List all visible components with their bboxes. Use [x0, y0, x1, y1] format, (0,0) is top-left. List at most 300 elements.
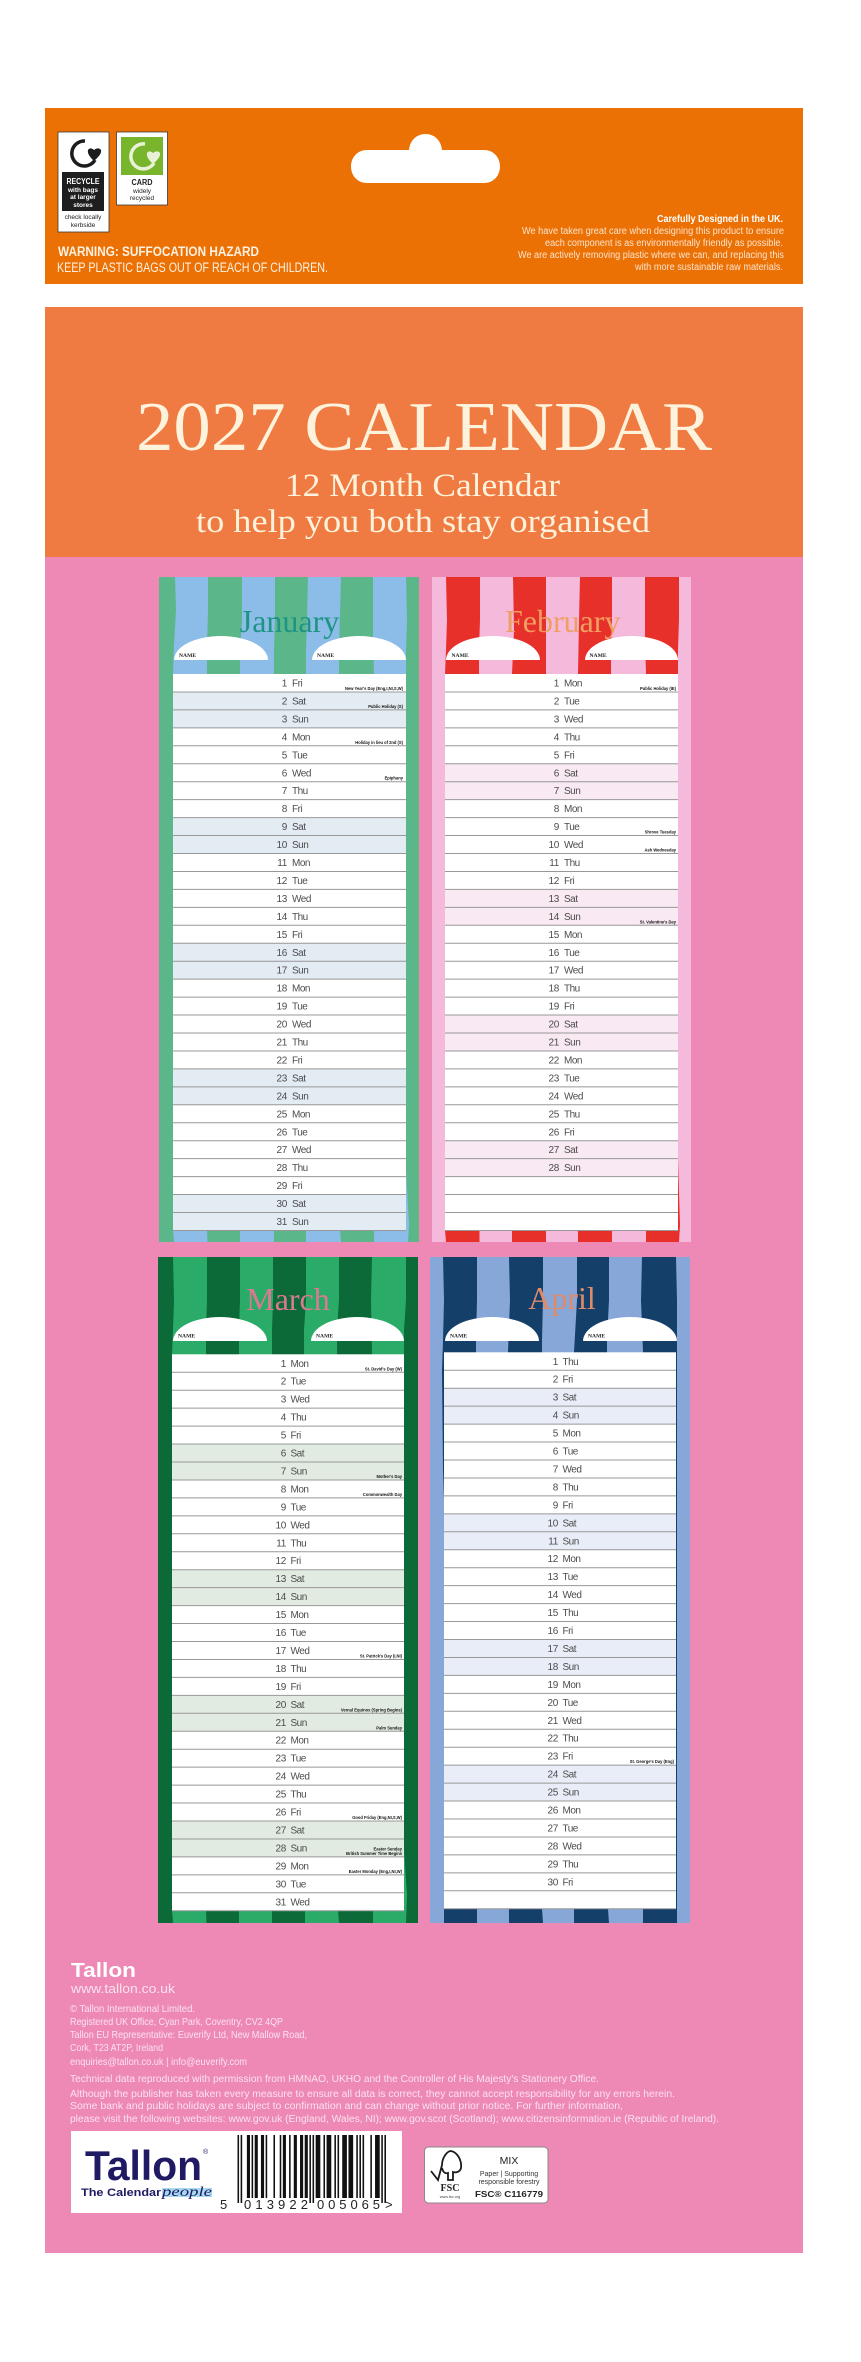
- day table: Mon: [290, 1861, 308, 1872]
- day table: Wed: [564, 966, 583, 977]
- day table: Thu: [290, 1664, 306, 1675]
- day table: Tue: [564, 1073, 580, 1084]
- day table: 21: [548, 1038, 560, 1048]
- day table: Wed: [292, 894, 311, 905]
- day table: 25: [548, 1109, 560, 1120]
- day table: [444, 1352, 676, 1909]
- website: www.tallon.co.uk: [70, 1981, 176, 1996]
- day table: Mon: [562, 1429, 580, 1440]
- day table: 12: [276, 876, 288, 887]
- publisher details: [70, 1960, 719, 2125]
- day table: 3: [281, 1395, 287, 1406]
- day table: Commonwealth Day: [363, 1492, 403, 1497]
- day table: Sun: [564, 1038, 580, 1048]
- day table: Sat: [292, 1199, 306, 1210]
- day table: Wed: [564, 1091, 583, 1102]
- day table: 28: [276, 1163, 288, 1174]
- day table: 1: [282, 678, 288, 690]
- day table: 29: [547, 1859, 559, 1870]
- day table: 22: [276, 1055, 288, 1066]
- day table: 16: [276, 948, 288, 959]
- addresses: © Tallon International Limited.: [70, 2003, 195, 2015]
- day table: Sat: [290, 1574, 305, 1585]
- day table: 7: [281, 1467, 287, 1478]
- environmental note: with more sustainable raw materials.: [634, 262, 783, 273]
- day table: 10: [276, 840, 288, 851]
- month title: April: [528, 1280, 596, 1316]
- day table: 5: [282, 750, 288, 761]
- day table: 19: [548, 1002, 560, 1013]
- day table: 15: [276, 930, 288, 941]
- day table: Tue: [564, 948, 580, 959]
- icon: FSC tree: [431, 2151, 461, 2180]
- day table: 9: [553, 1500, 559, 1511]
- icon: card widely recycled: widely: [132, 188, 152, 195]
- FSC certification label: www.fsc.org: [440, 2195, 460, 2199]
- subtitle: to help you both stay organised: [196, 504, 651, 540]
- day table: Fri: [564, 876, 574, 887]
- day table: St. George's Day (Eng): [630, 1759, 675, 1764]
- day table: Vernal Equinox (Spring Begins): [341, 1707, 403, 1712]
- day table: 27: [547, 1824, 559, 1835]
- day table: Public Holiday (S): [368, 704, 404, 709]
- icon: card widely recycled: recycled: [130, 195, 154, 202]
- day table: Sun: [290, 1467, 307, 1478]
- day table: 3: [554, 714, 560, 725]
- name tabs: [173, 1317, 404, 1341]
- day table: 24: [547, 1770, 559, 1781]
- day table: Thu: [564, 1109, 580, 1120]
- day table: 6: [553, 1447, 559, 1458]
- name tabs: [174, 636, 406, 660]
- legal text: Some bank and public holidays are subject to confirmation and can change without prior notice. For further information,: [70, 2101, 623, 2112]
- day table: 30: [547, 1877, 559, 1888]
- day table: Wed: [564, 840, 583, 851]
- day table: Mon: [290, 1484, 308, 1495]
- day table: 15: [548, 930, 560, 941]
- day table: Fri: [292, 804, 302, 815]
- day table: Wed: [290, 1772, 309, 1783]
- day table: 7: [282, 786, 288, 797]
- barcode digits: [220, 2197, 393, 2212]
- day table: 13: [548, 894, 560, 905]
- day table: St. Patrick's Day (I,NI): [360, 1654, 403, 1659]
- month title: March: [246, 1281, 330, 1317]
- day table: Tue: [564, 822, 580, 833]
- day table: 17: [276, 966, 288, 977]
- day table: Sun: [292, 1091, 308, 1102]
- day table: Sun: [564, 786, 580, 797]
- day table: Sun: [562, 1788, 579, 1799]
- day table: 14: [547, 1590, 559, 1601]
- day table: Sat: [290, 1700, 305, 1711]
- environmental note: We are actively removing plastic where we can, and replacing this: [518, 250, 784, 261]
- day table: 5: [281, 1431, 287, 1442]
- name tabs: NAME: [452, 653, 469, 659]
- logo: Tallon The Calendar people: people: [161, 2185, 212, 2200]
- day table: 15: [275, 1610, 287, 1621]
- day table: 23: [547, 1752, 559, 1763]
- FSC certification label: Paper | Supporting: [480, 2171, 538, 2178]
- day table: 19: [547, 1680, 559, 1691]
- day table: Fri: [564, 750, 574, 761]
- day table: Sun: [292, 840, 308, 851]
- day table: Thu: [290, 1538, 306, 1549]
- day table: Mon: [290, 1359, 308, 1370]
- day table: Fri: [290, 1431, 301, 1442]
- day table: Fri: [562, 1500, 573, 1511]
- day table: Easter Monday (Eng,I,NI,W): [349, 1869, 403, 1874]
- environmental note: Carefully Designed in the UK.: [657, 214, 783, 225]
- day table: Mon: [562, 1554, 580, 1565]
- day table: Sun: [290, 1592, 307, 1603]
- day table: Tue: [290, 1377, 307, 1388]
- day table: 27: [276, 1145, 288, 1156]
- day table: Wed: [564, 714, 583, 725]
- FSC certification label: MIX: [500, 2155, 518, 2167]
- day table: Sat: [564, 1145, 578, 1156]
- day table: 30: [276, 1199, 288, 1210]
- day table: 8: [554, 804, 560, 815]
- day table: 8: [553, 1482, 559, 1493]
- day table: Thu: [564, 732, 580, 743]
- day table: 18: [547, 1662, 559, 1673]
- day table: 12: [275, 1556, 287, 1567]
- day table: 2: [281, 1377, 287, 1388]
- day table: Tue: [562, 1698, 579, 1709]
- hanger hole: [351, 134, 500, 183]
- day table: 3: [282, 714, 288, 725]
- day table: 23: [275, 1754, 287, 1765]
- day table: 10: [275, 1520, 287, 1531]
- day table: Sat: [292, 948, 306, 959]
- day table: Mon: [290, 1736, 308, 1747]
- day table: 30: [275, 1879, 287, 1890]
- day table: 26: [547, 1806, 559, 1817]
- day table: Sun: [562, 1536, 579, 1547]
- legal text: please visit the following websites: www.gov.uk (England, Wales, NI); www.gov.scot (Scotland); www.citizensinformation.ie (Republic of Ireland).: [70, 2114, 719, 2125]
- day table: 20: [547, 1698, 559, 1709]
- day table: 4: [281, 1413, 287, 1424]
- icon: card widely recycled: [116, 132, 168, 205]
- day table: Sun: [290, 1843, 307, 1854]
- icon: recycle with bags: RECYCLE: [66, 177, 100, 186]
- day table: 28: [547, 1841, 559, 1852]
- day table: Mon: [564, 930, 582, 941]
- day table: 7: [553, 1465, 559, 1476]
- day table: Thu: [562, 1357, 578, 1368]
- day table: 31: [275, 1897, 287, 1908]
- day table: Wed: [562, 1716, 581, 1727]
- day table: Sat: [564, 894, 578, 905]
- day table: 5: [553, 1429, 559, 1440]
- day table: 1: [553, 1357, 559, 1368]
- day table: Mon: [564, 678, 582, 690]
- barcode panel: [71, 2131, 402, 2213]
- day table: British Summer Time Begins: [346, 1851, 403, 1856]
- day table: 9: [281, 1502, 287, 1513]
- legal text: Technical data reproduced with permission from HMNAO, UKHO and the Controller of His Majesty's Stationery Office.: [70, 2074, 599, 2085]
- day table: Wed: [562, 1590, 581, 1601]
- day table: Thu: [564, 984, 580, 995]
- day table: Thu: [562, 1734, 578, 1745]
- day table: Tue: [292, 1127, 308, 1138]
- day table: Mon: [290, 1610, 308, 1621]
- day table: Shrove Tuesday: [645, 830, 677, 835]
- day table: Thu: [292, 1038, 308, 1048]
- day table: Tue: [292, 750, 308, 761]
- barcode digits: 013922: [244, 2197, 308, 2212]
- day table: 13: [275, 1574, 287, 1585]
- day table: 26: [548, 1127, 560, 1138]
- day table: Fri: [564, 1127, 574, 1138]
- day table: 22: [547, 1734, 559, 1745]
- day table: Wed: [292, 768, 311, 779]
- day table: 23: [276, 1073, 288, 1084]
- addresses: Registered UK Office, Cyan Park, Coventry, CV2 4QP: [70, 2016, 283, 2028]
- day table: 29: [275, 1861, 287, 1872]
- title: 2027 CALENDAR: [136, 389, 712, 466]
- icon: recycle with bags: kerbside: [71, 222, 96, 229]
- day table: Sun: [292, 1217, 308, 1228]
- day table: Fri: [562, 1752, 573, 1763]
- day table: Easter Sunday: [374, 1846, 403, 1851]
- day table: Tue: [292, 876, 308, 887]
- day table: 11: [549, 858, 560, 869]
- day table: Thu: [562, 1859, 578, 1870]
- name tabs: NAME: [317, 653, 334, 659]
- panel: April: [430, 1257, 690, 1923]
- day table: Wed: [290, 1395, 309, 1406]
- day table: Mon: [564, 1055, 582, 1066]
- icon: recycle with bags: at larger: [70, 194, 96, 201]
- day table: 4: [282, 732, 288, 743]
- day table: Wed: [292, 1020, 311, 1031]
- day table: Tue: [562, 1447, 579, 1458]
- day table: 31: [276, 1217, 288, 1228]
- day table: New Year's Day (Eng,I,NI,S,W): [345, 686, 404, 691]
- warning text: KEEP PLASTIC BAGS OUT OF REACH OF CHILDREN.: [57, 260, 328, 275]
- day table: 18: [275, 1664, 287, 1675]
- brand name: Tallon: [71, 1960, 136, 1982]
- day table: Sat: [292, 1073, 306, 1084]
- subtitle: [196, 468, 651, 540]
- day table: 17: [275, 1646, 287, 1657]
- day table: Sat: [564, 768, 578, 779]
- day table: [445, 674, 678, 1230]
- day table: 13: [276, 894, 288, 905]
- day table: 27: [275, 1826, 287, 1837]
- day table: Sat: [290, 1449, 305, 1460]
- day table: 6: [281, 1449, 287, 1460]
- day table: Thu: [290, 1790, 306, 1801]
- icon: recycle with bags: stores: [73, 202, 93, 209]
- day table: 12: [548, 876, 560, 887]
- day table: 22: [275, 1736, 287, 1747]
- day table: St. David's Day (W): [365, 1366, 403, 1371]
- day table: 4: [553, 1411, 559, 1422]
- day table: 6: [554, 768, 560, 779]
- day table: Sun: [290, 1718, 307, 1729]
- day table: Holiday in lieu of 2nd (S): [355, 740, 404, 745]
- month title: January: [240, 603, 339, 639]
- day table: Tue: [292, 1002, 308, 1013]
- day table: Mon: [292, 1109, 310, 1120]
- panel: March: [158, 1257, 418, 1923]
- day table: Palm Sunday: [376, 1725, 403, 1730]
- name tabs: [446, 636, 678, 660]
- day table: Tue: [290, 1754, 307, 1765]
- day table: Mon: [562, 1680, 580, 1691]
- day table: Wed: [562, 1465, 581, 1476]
- day table: 2: [554, 696, 560, 707]
- day table: 20: [275, 1700, 287, 1711]
- day table: 11: [277, 858, 288, 869]
- addresses: Tallon EU Representative: Euverify Ltd, New Mallow Road,: [70, 2029, 307, 2041]
- addresses: Cork, T23 AT2P, Ireland: [70, 2042, 163, 2054]
- day table: Fri: [562, 1626, 573, 1637]
- warning text: [57, 244, 328, 275]
- day table: St. Valentine's Day: [640, 919, 677, 924]
- day table: Fri: [290, 1808, 301, 1819]
- day table: 9: [554, 822, 560, 833]
- day table: Wed: [290, 1897, 309, 1908]
- day table: 16: [548, 948, 560, 959]
- addresses: [70, 2003, 307, 2068]
- FSC certification label: [424, 2147, 548, 2203]
- day table: 10: [548, 840, 560, 851]
- header: title banner: [45, 307, 803, 557]
- day table: 21: [276, 1038, 288, 1048]
- environmental note: We have taken great care when designing this product to ensure: [522, 226, 784, 237]
- icon: recycle with bags: check locally: [65, 214, 102, 221]
- day table: Fri: [290, 1556, 301, 1567]
- day table: 14: [548, 912, 560, 923]
- day table: Sun: [564, 1163, 580, 1174]
- packaging top strip: [45, 108, 803, 284]
- day table: 19: [276, 1002, 288, 1013]
- name tabs: NAME: [178, 1334, 195, 1340]
- day table: 24: [275, 1772, 287, 1783]
- day table: 8: [281, 1484, 287, 1495]
- day table: Fri: [292, 1055, 302, 1066]
- day table: Tue: [290, 1502, 307, 1513]
- day table: Sat: [562, 1770, 577, 1781]
- name tabs: NAME: [588, 1334, 605, 1340]
- day table: Wed: [562, 1841, 581, 1852]
- day table: 1: [281, 1359, 287, 1370]
- day table: 11: [276, 1538, 287, 1549]
- day table: Thu: [292, 786, 308, 797]
- name tabs: NAME: [590, 653, 607, 659]
- legal text: Although the publisher has taken every measure to ensure all data is correct, they cannot accept responsibility for any errors herein.: [70, 2089, 675, 2100]
- day table: Sun: [562, 1411, 579, 1422]
- FSC certification label: FSC® C116779: [475, 2189, 543, 2199]
- name tabs: NAME: [179, 653, 196, 659]
- day table: Sat: [292, 822, 306, 833]
- day table: Thu: [562, 1608, 578, 1619]
- day table: Fri: [292, 930, 302, 941]
- day table: 20: [276, 1020, 288, 1031]
- barcode bars: [238, 2135, 386, 2203]
- day table: Tue: [290, 1628, 307, 1639]
- day table: [173, 674, 406, 1230]
- environmental note: [518, 214, 784, 273]
- name tabs: NAME: [450, 1334, 467, 1340]
- name tabs: NAME: [316, 1334, 333, 1340]
- addresses: enquiries@tallon.co.uk | info@euverify.com: [70, 2056, 247, 2068]
- day table: Mother's Day: [376, 1474, 403, 1479]
- day table: 15: [547, 1608, 559, 1619]
- day table: Mon: [562, 1806, 580, 1817]
- day table: 22: [548, 1055, 560, 1066]
- day table: 17: [548, 966, 560, 977]
- day table: Sat: [562, 1518, 577, 1529]
- month title: February: [505, 603, 620, 639]
- day table: Sun: [292, 714, 308, 725]
- logo: Tallon The Calendar people: The Calendar: [81, 2187, 162, 2199]
- barcode digits: >: [385, 2197, 393, 2212]
- day table: Sun: [292, 966, 308, 977]
- day table: 25: [547, 1788, 559, 1799]
- day table: 14: [275, 1592, 287, 1603]
- logo: Tallon The Calendar people: Tallon: [85, 2142, 202, 2189]
- icon: recycle with bags: [58, 132, 109, 232]
- day table: Sat: [292, 696, 306, 707]
- day table: 20: [548, 1020, 560, 1031]
- day table: 13: [547, 1572, 559, 1583]
- day table: Thu: [292, 1163, 308, 1174]
- day table: 1: [554, 678, 560, 690]
- day table: Thu: [290, 1413, 306, 1424]
- day table: 2: [553, 1375, 559, 1386]
- barcode digits: 5: [220, 2197, 227, 2212]
- day table: Thu: [564, 858, 580, 869]
- day table: Epiphany: [385, 776, 404, 781]
- icon: card widely recycled: CARD: [132, 178, 153, 187]
- day table: 21: [547, 1716, 559, 1727]
- day table: 24: [276, 1091, 288, 1102]
- day table: Wed: [292, 1145, 311, 1156]
- day table: Public Holiday (IE): [640, 686, 677, 691]
- day table: 9: [282, 822, 288, 833]
- day table: 23: [548, 1073, 560, 1084]
- day table: Mon: [564, 804, 582, 815]
- day table: 28: [275, 1843, 287, 1854]
- day table: Tue: [562, 1572, 579, 1583]
- day table: 24: [548, 1091, 560, 1102]
- legal text: [70, 2074, 719, 2125]
- day table: Fri: [562, 1877, 573, 1888]
- day table: Fri: [564, 1002, 574, 1013]
- day table: Sat: [562, 1393, 577, 1404]
- day table: Mon: [292, 732, 310, 743]
- day table: Fri: [292, 678, 302, 690]
- day table: 25: [275, 1790, 287, 1801]
- day table: 29: [276, 1181, 288, 1192]
- day table: Sun: [564, 912, 580, 923]
- day table: Fri: [562, 1375, 573, 1386]
- day table: 17: [547, 1644, 559, 1655]
- day table: Sat: [290, 1826, 305, 1837]
- pink background panel: [45, 557, 803, 2253]
- day table: Sat: [564, 1020, 578, 1031]
- day table: 6: [282, 768, 288, 779]
- subtitle: 12 Month Calendar: [285, 468, 560, 504]
- day table: 10: [547, 1518, 559, 1529]
- day table: 14: [276, 912, 288, 923]
- day table: 5: [554, 750, 560, 761]
